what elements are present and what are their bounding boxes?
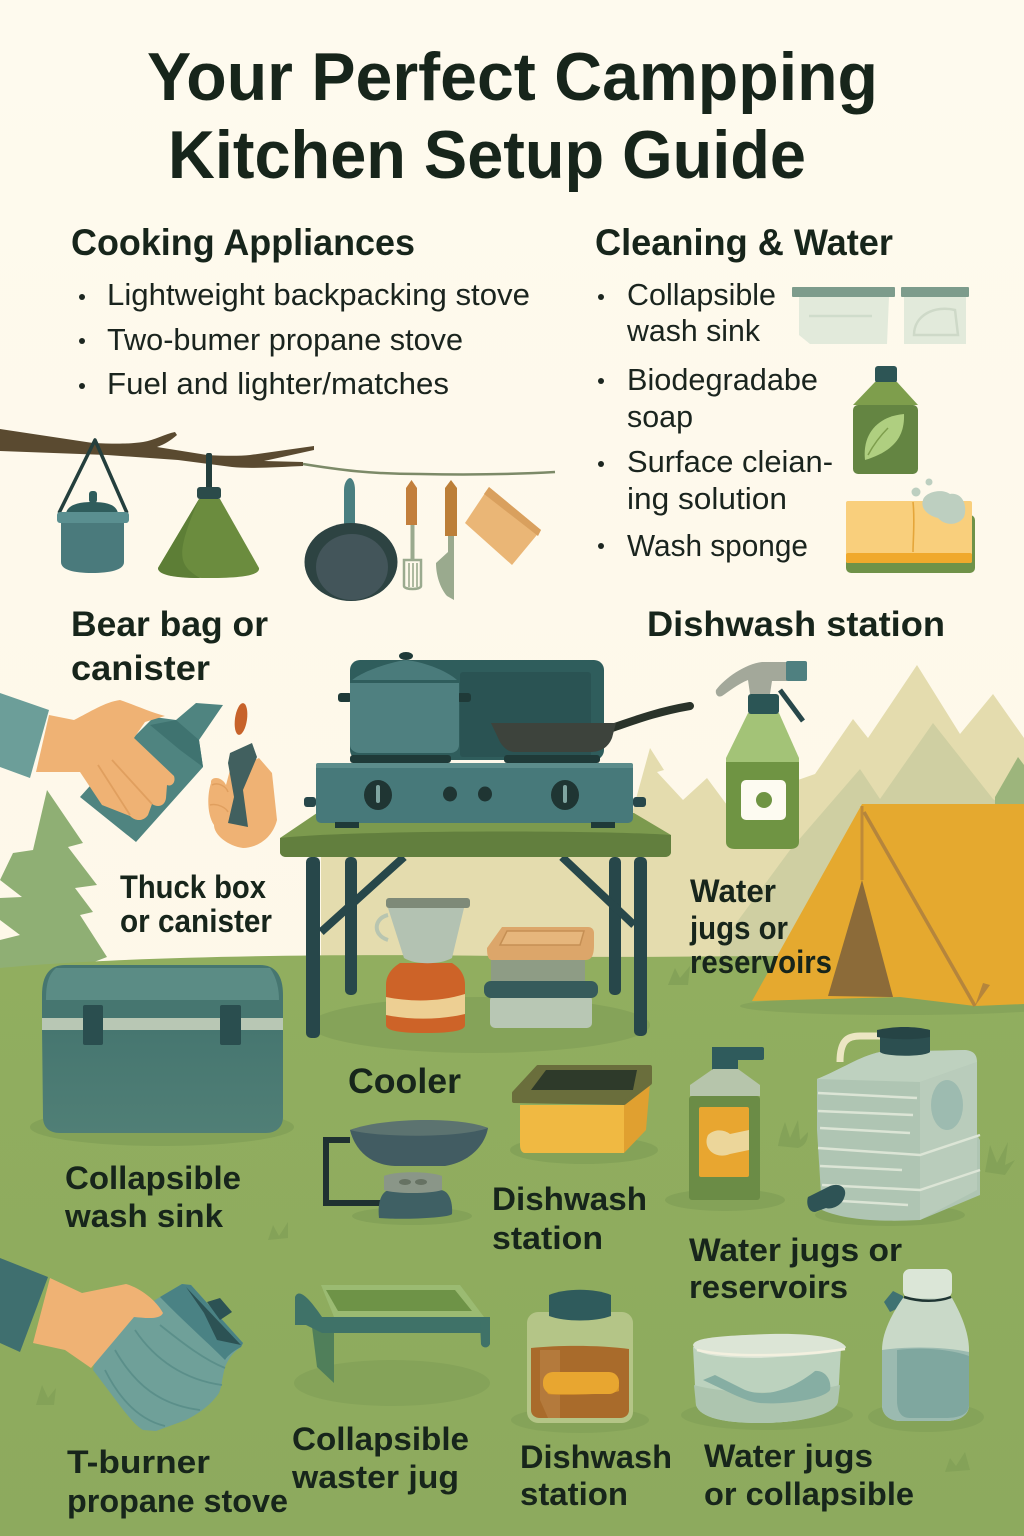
label: dishwash station top: Dishwash station (647, 605, 945, 644)
label: dishwash station middle: station (492, 1220, 603, 1256)
label: t-burner propane stove: propane stove (67, 1483, 288, 1519)
icon: small soap pump bottle (665, 1047, 785, 1211)
title (147, 39, 878, 193)
label: dishwash station bottom (520, 1439, 672, 1512)
label: thuck box: or canister (120, 903, 272, 939)
list: cooking appliances (79, 277, 530, 401)
label: bear bag (71, 605, 268, 688)
icon: cutting board (465, 487, 541, 565)
label: water jugs on tent (689, 873, 832, 980)
illustration: hand holding collapsible jug (0, 1258, 243, 1431)
heading: cooking appliances: Cooking Appliances (71, 222, 415, 263)
icon: knife (436, 480, 457, 600)
icon: frying pan (304, 478, 398, 601)
label: dishwash station middle: Dishwash (492, 1181, 647, 1217)
tent (740, 804, 1024, 1015)
label: water jugs or collapsible: or collapsible (704, 1476, 914, 1512)
icon: yellow dish bin (510, 1067, 658, 1164)
list: cleaning and water (598, 277, 833, 563)
label: t-burner propane stove: T-burner (67, 1444, 210, 1480)
illustration: cooler (30, 965, 294, 1146)
illustration: camp table (280, 813, 671, 1053)
label: dishwash station middle (492, 1181, 647, 1256)
list: cleaning and water: Collapsible (627, 277, 776, 312)
list: cleaning and water: Wash sponge (627, 528, 808, 563)
label: t-burner propane stove (67, 1444, 288, 1519)
label: water jugs or reservoirs (689, 1232, 902, 1305)
label: thuck box (120, 869, 272, 939)
label: collapsible wash sink: Collapsible (65, 1160, 241, 1196)
illustration: two-burner propane stove (304, 652, 690, 828)
title: Kitchen Setup Guide (168, 117, 806, 193)
panel: cleaning and water (595, 222, 975, 573)
icon: hanging pot (57, 440, 129, 573)
list: cooking appliances: Two-bumer propane stove (107, 322, 463, 357)
list: cooking appliances: Fuel and lighter/matches (107, 366, 449, 401)
list: cleaning and water: ing solution (627, 481, 787, 516)
list: cooking appliances: Lightweight backpacking stove (107, 277, 530, 312)
icon: plastic basin (681, 1334, 853, 1430)
icon: spatula (404, 480, 421, 589)
label: collapsible waster jug: Collapsible (292, 1421, 469, 1457)
icon: wash sponge (846, 478, 975, 573)
panel: cooking appliances (71, 222, 530, 401)
label: water jugs or collapsible: Water jugs (704, 1438, 873, 1474)
list: cleaning and water: Surface cleian- (627, 444, 833, 479)
icon: stacked food containers (484, 927, 598, 1028)
label: water jugs or reservoirs: reservoirs (689, 1269, 848, 1305)
label: collapsible waster jug (291, 1421, 469, 1495)
tree left (0, 790, 107, 975)
grass tufts (36, 966, 1015, 1472)
label: water jugs on tent: Water (690, 873, 776, 909)
label: dishwash station bottom: Dishwash (520, 1439, 672, 1475)
label: collapsible wash sink (64, 1160, 241, 1234)
branch with rope (0, 429, 555, 474)
label: water jugs on tent: reservoirs (690, 944, 832, 980)
label: collapsible waster jug: waster jug (291, 1459, 459, 1495)
label: water jugs on tent: jugs or (689, 910, 788, 946)
list: cleaning and water: Biodegradabe (627, 362, 818, 397)
icon: spray bottle (716, 661, 807, 849)
icon: water jerry can (807, 1027, 980, 1226)
illustration: hand pouring fuel (0, 693, 223, 842)
label: bear bag: canister (71, 649, 210, 688)
icon: skillet (491, 706, 690, 752)
icon: mug on canister (377, 898, 470, 1033)
icon: collapsible basin (294, 1285, 490, 1406)
icon: collapsible sink containers (792, 287, 969, 344)
label: water jugs or collapsible (704, 1438, 914, 1512)
mountains backdrop (321, 665, 1024, 1000)
list: cleaning and water: soap (627, 399, 693, 434)
icon: soap bottle (853, 366, 918, 474)
icon: single burner stove (326, 1120, 488, 1225)
list: cleaning and water: wash sink (626, 313, 760, 348)
label: thuck box: Thuck box (120, 869, 266, 905)
ground (0, 955, 1024, 1536)
title: Your Perfect Campping (147, 39, 878, 115)
label: collapsible wash sink: wash sink (64, 1198, 223, 1234)
label: bear bag: Bear bag or (71, 605, 268, 644)
label: water jugs or reservoirs: Water jugs or (689, 1232, 902, 1268)
label: dishwash station bottom: station (520, 1476, 628, 1512)
icon: water bottle (868, 1269, 984, 1432)
icon: stock pot (338, 652, 471, 753)
heading: cleaning and water: Cleaning & Water (595, 222, 893, 263)
icon: glass jar with sponge (511, 1290, 649, 1433)
label: cooler: Cooler (348, 1062, 461, 1101)
icon: hanging cone bag (158, 453, 259, 578)
illustration: lighter in hand (208, 702, 277, 848)
